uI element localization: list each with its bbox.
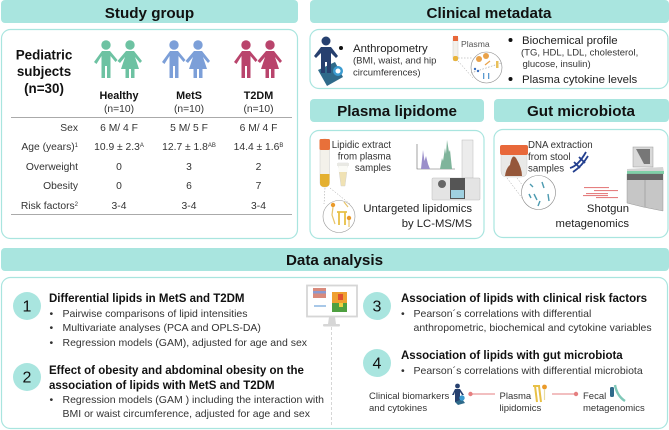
header: Data analysis: Data analysis [286, 252, 383, 269]
item 3: clinical risk factors [363, 292, 652, 334]
divider line [330, 327, 332, 425]
table: cohort characteristics: 3-4 [182, 201, 197, 212]
header: Study group: Study group [105, 5, 194, 22]
table: cohort characteristics: 0 [116, 181, 122, 192]
table: cohort characteristics: Sex [60, 123, 79, 134]
item 4: gut microbiota [363, 349, 643, 377]
item 2: effect of obesity [13, 363, 324, 420]
diagram: data integration: and cytokines [369, 403, 427, 414]
icon: microbes magnifier [507, 176, 556, 210]
table: cohort characteristics: 3-4 [251, 201, 266, 212]
diagram: data integration [369, 384, 645, 414]
text: DNA extraction: from stool [528, 152, 571, 163]
text: DNA extraction: samples [528, 164, 564, 174]
text: DNA extraction [528, 140, 593, 174]
text: biochemical profile and cytokines: glucose, insulin) [522, 59, 591, 70]
icon: mass spectrometer [432, 140, 480, 200]
icon: monitor with heatmap [307, 286, 357, 326]
table: cohort characteristics: MetS [176, 90, 202, 102]
header: Plasma lipidome [310, 99, 484, 122]
icon: healthy children [94, 40, 142, 78]
diagram: data integration: Clinical biomarkers [369, 391, 449, 402]
header: Clinical metadata [310, 0, 669, 23]
table: cohort characteristics [11, 90, 292, 215]
panel: plasma lipidome [310, 130, 484, 238]
table: cohort characteristics: (n=10) [243, 104, 274, 115]
text: lipidic extract: samples [355, 163, 391, 174]
header: Plasma lipidome: Plasma lipidome [337, 103, 457, 120]
table: cohort characteristics: 2 [75, 202, 79, 208]
diagram: data integration: Fecal [583, 391, 606, 402]
text: shotgun metagenomics [556, 203, 629, 230]
item 4: gut microbiota: • [401, 365, 405, 377]
text: biochemical profile and cytokines [508, 35, 638, 86]
table: cohort characteristics: 7 [256, 181, 262, 192]
item 3: clinical risk factors: Pearson´s correlations with differential [414, 308, 591, 320]
item 1: differential lipids [13, 292, 308, 349]
header: Clinical metadata: Clinical metadata [427, 5, 552, 22]
text: lipidic extract: Lipidic extract [332, 140, 391, 151]
item 1: differential lipids: Pairwise comparisons of lipid intensities [62, 308, 248, 320]
text: anthropometry: circumferences) [353, 68, 421, 78]
table: cohort characteristics: 6 M/ 4 F [240, 123, 277, 134]
icon: lipid magnifier [323, 188, 355, 232]
heading: pediatric subjects: subjects [17, 64, 71, 79]
text: shotgun metagenomics: metagenomics [556, 218, 629, 230]
table: cohort characteristics: T2DM [244, 90, 273, 102]
item 1: differential lipids: Multivariate analyses (PCA and OPLS-DA) [62, 322, 261, 334]
table: cohort characteristics: 1 [75, 143, 79, 149]
table: cohort characteristics: Healthy [99, 90, 139, 102]
text: shotgun metagenomics: Shotgun [587, 203, 629, 215]
heading: pediatric subjects: (n=30) [24, 81, 64, 96]
table: cohort characteristics: 3-4 [112, 201, 127, 212]
table: cohort characteristics: 3 [186, 162, 192, 173]
text: lipidic extract [332, 140, 392, 174]
table: cohort characteristics: AB [208, 143, 216, 149]
text: lipidic extract: from plasma [338, 152, 392, 162]
item 2: effect of obesity: 2 [23, 370, 32, 386]
item 2: effect of obesity: Regression models (GAM ) including the interaction with [62, 394, 324, 406]
text: biochemical profile and cytokines: (TG, HDL, LDL, cholesterol, [521, 48, 638, 58]
table: cohort characteristics: Risk factors [21, 201, 75, 212]
diagram: data integration: metagenomics [583, 403, 645, 414]
icon: sequencer [627, 147, 664, 211]
icon: person on scale [314, 36, 343, 86]
text: DNA extraction: DNA extraction [528, 140, 593, 151]
icon: MetS children [162, 40, 210, 78]
panel: gut microbiota [494, 130, 668, 238]
item 4: gut microbiota: Association of lipids with gut microbiota [401, 350, 623, 362]
text: anthropometry: Anthropometry [353, 43, 428, 55]
table: cohort characteristics: (n=10) [104, 104, 134, 115]
item 2: effect of obesity: association of lipids with MetS and T2DM [49, 380, 275, 392]
item 1: differential lipids: Regression models (GAM), adjusted for age and sex [62, 337, 308, 349]
text: untargeted lipidomics [363, 203, 472, 230]
icon: microbiome [610, 385, 625, 401]
item 2: effect of obesity: Effect of obesity and abdominal obesity on the [49, 365, 304, 377]
table: cohort characteristics: (n=10) [174, 104, 204, 115]
header: Gut microbiota [494, 99, 669, 122]
table: cohort characteristics: 5 M/ 5 F [170, 123, 208, 134]
item 3: clinical risk factors: 3 [373, 298, 382, 316]
item 4: gut microbiota: 4 [373, 356, 382, 372]
icon: DNA helix [570, 152, 588, 172]
table: cohort characteristics: 0 [116, 162, 122, 173]
item 2: effect of obesity: • [50, 394, 54, 406]
item 1: differential lipids: 1 [23, 298, 32, 316]
panel: study group [2, 30, 298, 238]
table: cohort characteristics: B [279, 143, 283, 149]
arrow: lipidomics to metagenomics [552, 392, 578, 396]
item 1: differential lipids: • [50, 322, 54, 334]
table: cohort characteristics: A [140, 143, 144, 149]
chart: chromatogram [417, 140, 455, 169]
header: Gut microbiota: Gut microbiota [527, 103, 636, 120]
table: cohort characteristics: 12.7 ± 1.8 [162, 142, 208, 153]
icon: stool sample jar [500, 145, 528, 177]
table: cohort characteristics: 6 [186, 181, 192, 192]
text: biochemical profile and cytokines: Biochemical profile [522, 35, 618, 47]
table: cohort characteristics: 10.9 ± 2.3 [94, 142, 140, 153]
panel: data analysis [2, 278, 668, 428]
icon: person [452, 384, 465, 405]
item 2: effect of obesity: BMI or waist circumference, adjusted for age and sex [62, 408, 311, 420]
item 1: differential lipids: Differential lipids in MetS and T2DM [49, 293, 245, 305]
text: biochemical profile and cytokines: Plasma cytokine levels [522, 74, 638, 86]
header: Study group [1, 0, 298, 23]
item 3: clinical risk factors: • [401, 308, 405, 320]
diagram: data integration: Plasma [500, 391, 532, 402]
table: cohort characteristics: 2 [256, 162, 262, 173]
table: cohort characteristics: 14.4 ± 1.6 [234, 142, 279, 153]
item 1: differential lipids: • [50, 308, 54, 320]
text: untargeted lipidomics: by LC-MS/MS [402, 218, 472, 230]
icon: T2DM children [234, 40, 282, 78]
item 4: gut microbiota: Pearson´s correlations with differential microbiota [414, 365, 643, 377]
table: cohort characteristics: Age (years) [21, 142, 75, 153]
icon: sequencing reads [583, 187, 618, 198]
item 3: clinical risk factors: Association of lipids with clinical risk factors [401, 293, 647, 305]
item 3: clinical risk factors: anthropometric, biochemical and cytokine variables [414, 322, 652, 334]
text: untargeted lipidomics: Untargeted lipidomics [363, 203, 472, 215]
text: anthropometry [339, 43, 436, 78]
heading: pediatric subjects [16, 48, 73, 96]
icon: extract tube [320, 139, 349, 187]
panel: clinical metadata [310, 30, 668, 88]
arrow: clinical to lipidomics [468, 392, 495, 396]
icon: plasma tube and lens: Plasma [461, 39, 490, 49]
table: cohort characteristics: Obesity [43, 181, 79, 192]
icon: plasma tube and lens [453, 36, 502, 83]
item 1: differential lipids: • [50, 337, 54, 349]
table: cohort characteristics: Overweight [26, 162, 78, 173]
table: cohort characteristics: 6 M/ 4 F [100, 123, 138, 134]
heading: pediatric subjects: Pediatric [16, 48, 73, 62]
text: anthropometry: (BMI, waist, and hip [353, 56, 436, 66]
icon: lipids [533, 385, 547, 402]
header: Data analysis [1, 248, 669, 271]
diagram: data integration: lipidomics [500, 403, 541, 414]
